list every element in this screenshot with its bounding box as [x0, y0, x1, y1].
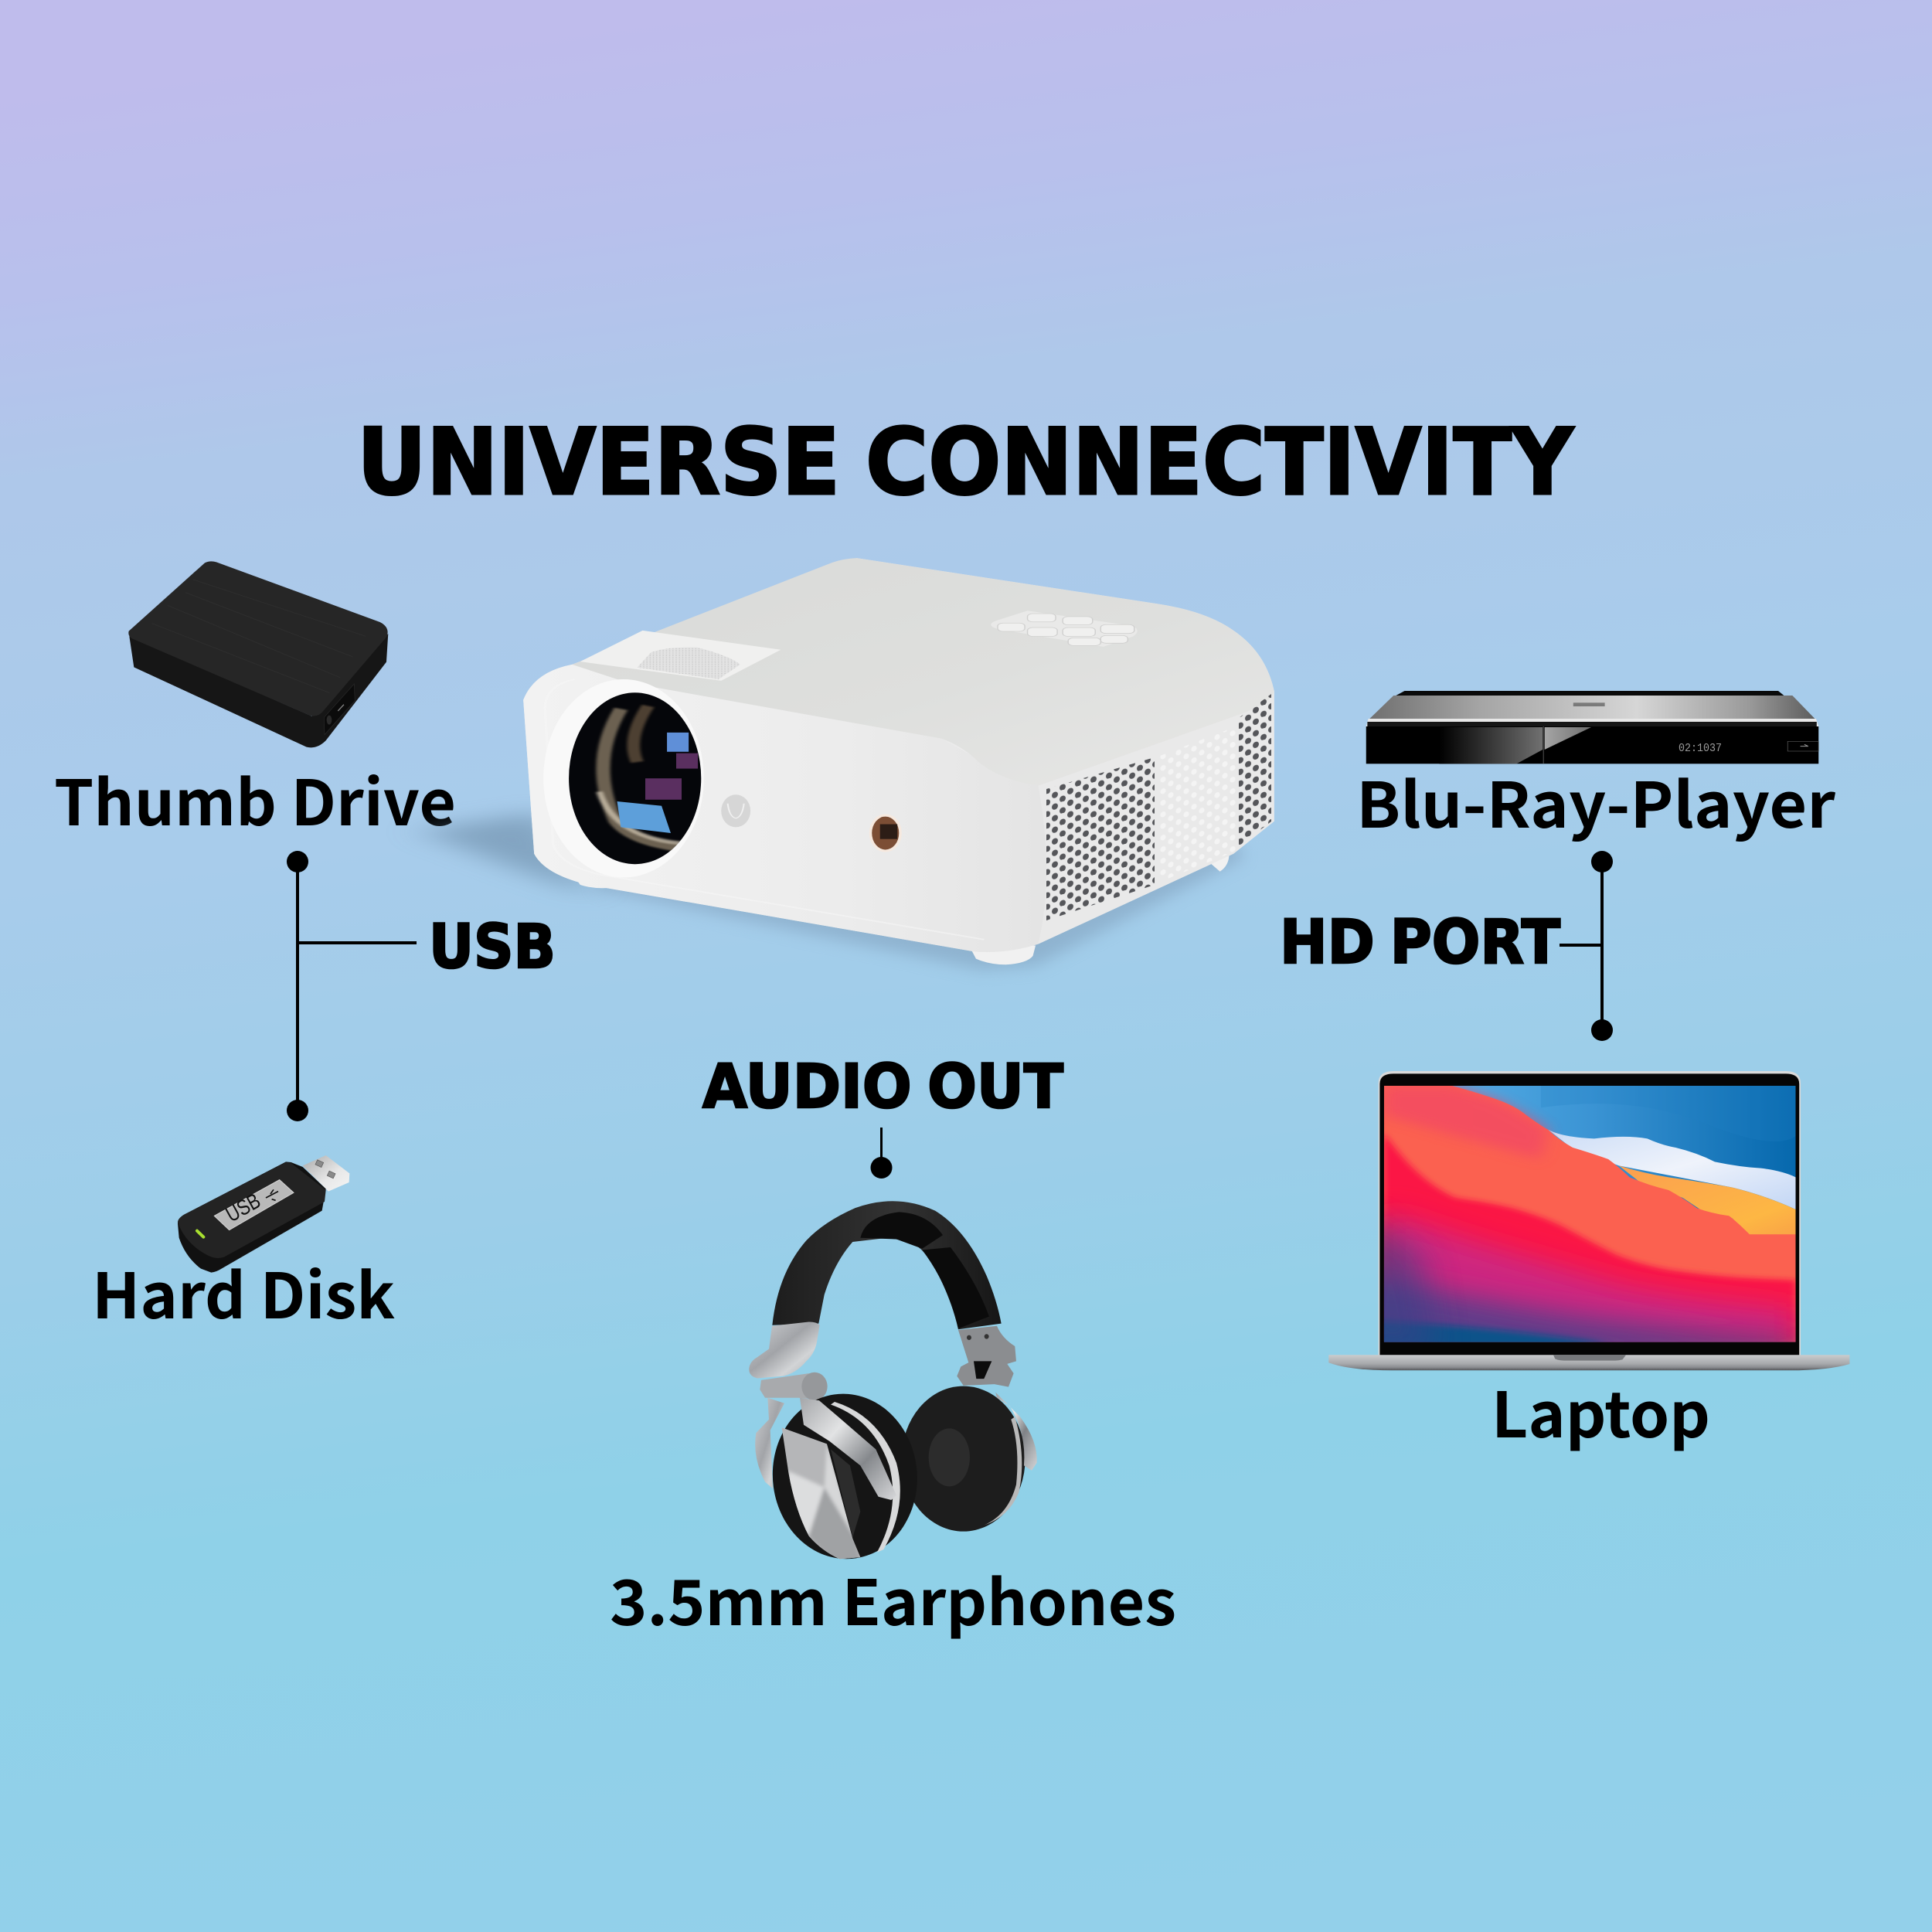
- right yoke: [995, 1393, 1037, 1471]
- laptop screen wallpaper: [1383, 1086, 1796, 1342]
- left hinge: [749, 1321, 820, 1378]
- projector shell front: [523, 665, 1046, 952]
- front bevel: [545, 679, 984, 940]
- focus wheel: [637, 648, 740, 679]
- lens ring: [543, 679, 704, 877]
- connector: audio out link: [870, 1128, 892, 1179]
- icon: laptop: [1328, 1071, 1849, 1370]
- left ear cup: [763, 1384, 927, 1569]
- label: Hard Disk: Hard Disk: [92, 1247, 395, 1337]
- projector body: [523, 558, 1274, 964]
- keypad: [991, 611, 1138, 647]
- left axle: [760, 1373, 814, 1399]
- right hinge: [957, 1326, 1016, 1387]
- icon: Blu-ray player: [1366, 691, 1818, 764]
- laptop lid: [1379, 1071, 1801, 1356]
- projector shadow: [417, 811, 1244, 970]
- left yoke: [755, 1398, 784, 1488]
- logo button: [721, 794, 750, 827]
- projector speaker grilles: [1046, 694, 1271, 920]
- right cup rim: [984, 1417, 1022, 1526]
- label: Laptop: Laptop: [1492, 1366, 1710, 1456]
- label: AUDIO OUT: AUDIO OUT: [702, 1053, 1063, 1122]
- icon: headphones: [749, 1201, 1037, 1569]
- label: HD PORT: HD PORT: [1280, 908, 1560, 978]
- label: 3.5mm Earphones: 3.5mm Earphones: [610, 1553, 1176, 1644]
- icon: external drive labelled Thumb Drive: [128, 561, 388, 747]
- laptop base: [1328, 1355, 1849, 1370]
- Blu-ray display digits: 02:1037: [1679, 742, 1722, 755]
- left cup rim: [831, 1402, 900, 1553]
- right ear cushion: [902, 1386, 1026, 1532]
- focus wheel knurl: [637, 648, 740, 679]
- projector side face: [1039, 691, 1274, 944]
- connector: USB link: [287, 851, 417, 1121]
- IR sensor: [869, 815, 902, 852]
- icon: USB stick labelled Hard Disk: [178, 1155, 349, 1273]
- lens: [569, 692, 701, 864]
- label: Thumb Drive: Thumb Drive: [54, 753, 456, 844]
- label: Blu-Ray-Player: Blu-Ray-Player: [1356, 756, 1836, 846]
- headband logo plate: [922, 1247, 989, 1328]
- connector: HD PORT link: [1560, 851, 1613, 1041]
- title: UNIVERSE CONNECTIVITY: [357, 410, 1575, 516]
- headband cushion: [860, 1212, 943, 1249]
- projector feet: [575, 854, 1230, 964]
- label: USB: USB: [429, 913, 556, 982]
- projector silhouette: [523, 558, 1274, 952]
- focus window: [580, 631, 781, 681]
- projector top surface: [572, 558, 1274, 786]
- headband: [772, 1201, 1002, 1329]
- silver arm: [800, 1398, 896, 1500]
- USB stick imprint: USB: [222, 1189, 264, 1226]
- inner black curve: [831, 1449, 860, 1537]
- silver disc: [782, 1428, 861, 1560]
